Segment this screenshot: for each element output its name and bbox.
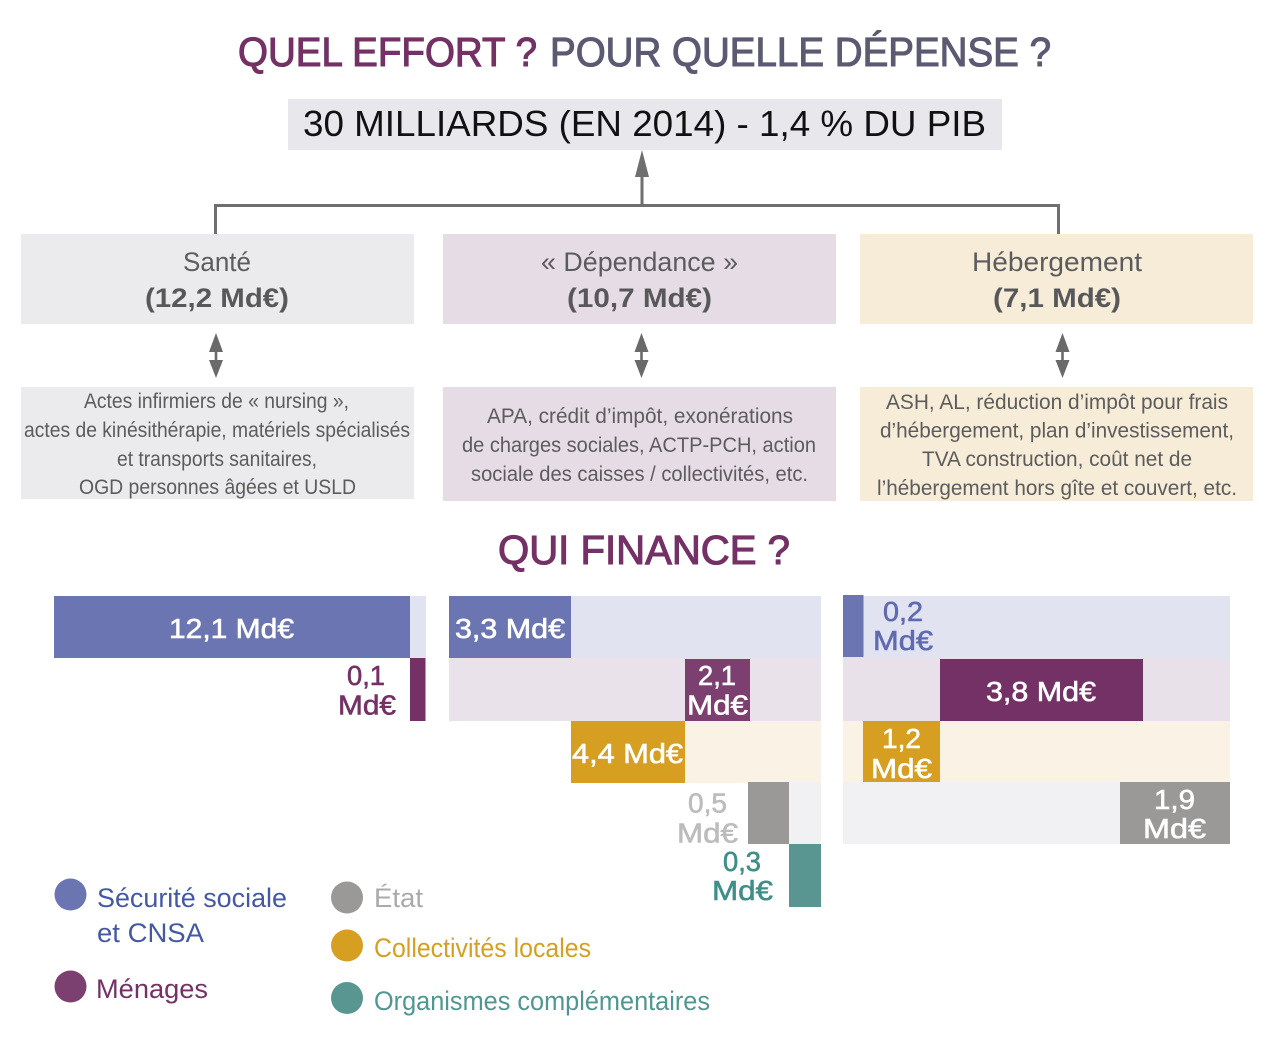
title	[238, 29, 1051, 75]
panel: santé details: OGD personnes âgées et USLD	[79, 476, 356, 499]
chart: hébergement financing: 1,9	[1154, 784, 1195, 815]
panel: hébergement details: l’hébergement hors gîte et couvert, etc.	[877, 477, 1237, 500]
panel: santé heading: (12,2 Md€)	[145, 283, 289, 313]
chart: dépendance financing: Md€	[687, 690, 748, 720]
legend: ménages	[54, 970, 208, 1004]
chart: santé financing: 0,1	[347, 660, 385, 691]
panel: hébergement heading: (7,1 Md€)	[993, 283, 1121, 313]
panel: santé details: et transports sanitaires,	[117, 448, 317, 471]
legend: ménages: Ménages	[96, 974, 208, 1004]
panel: dépendance details	[443, 387, 836, 501]
panel: santé heading: Santé	[183, 247, 251, 277]
legend: état	[331, 882, 424, 914]
chart: santé financing	[54, 596, 426, 721]
panel: dépendance heading: « Dépendance »	[541, 247, 738, 277]
chart: hébergement financing: Md€	[871, 753, 932, 784]
title: QUEL EFFORT ?	[238, 29, 537, 75]
chart: hébergement financing: 0,2	[883, 596, 923, 627]
panel: hébergement details	[860, 387, 1253, 501]
chart: dépendance financing: 0,3	[723, 846, 761, 877]
chart: dépendance financing: Md€	[712, 875, 773, 906]
chart: hébergement financing: 1,2	[882, 723, 921, 754]
legend: sécurité sociale et CNSA: et CNSA	[97, 918, 204, 948]
legend: sécurité sociale et CNSA	[54, 878, 287, 948]
arrow: connector to total	[216, 150, 1058, 234]
total banner: 30 MILLIARDS (EN 2014) - 1,4 % DU PIB	[303, 103, 986, 144]
panel: santé heading	[21, 234, 414, 324]
panel: hébergement heading: Hébergement	[972, 247, 1143, 277]
arrow: dépendance double	[634, 333, 648, 378]
chart: dépendance financing: 3,3 Md€	[455, 613, 565, 644]
title: POUR QUELLE DÉPENSE ?	[550, 29, 1051, 75]
panel: dépendance details: sociale des caisses / collectivités, etc.	[471, 463, 808, 486]
panel: dépendance details: de charges sociales, ACTP-PCH, action	[462, 434, 816, 457]
arrow: santé double	[209, 333, 223, 378]
chart: hébergement financing: Md€	[873, 625, 933, 656]
panel: hébergement details: TVA construction, coût net de	[922, 448, 1192, 471]
chart: hébergement financing: 3,8 Md€	[986, 676, 1096, 707]
heading: qui finance: QUI FINANCE ?	[498, 527, 790, 573]
panel: hébergement details: d’hébergement, plan d’investissement,	[880, 420, 1234, 442]
chart: dépendance financing	[449, 596, 821, 907]
chart: dépendance financing: 4,4 Md€	[572, 738, 683, 769]
chart: hébergement financing: Md€	[1143, 813, 1206, 844]
panel: santé details: Actes infirmiers de « nursing »,	[84, 390, 349, 413]
panel: dépendance heading	[443, 234, 836, 324]
chart: dépendance financing: 2,1	[698, 660, 736, 691]
panel: hébergement details: ASH, AL, réduction d’impôt pour frais	[886, 391, 1228, 414]
chart: santé financing: Md€	[338, 690, 396, 720]
legend: état: État	[374, 883, 424, 913]
arrow: hébergement double	[1056, 333, 1070, 378]
panel: dépendance details: APA, crédit d’impôt, exonérations	[487, 405, 793, 428]
panel: dépendance heading: (10,7 Md€)	[567, 283, 712, 313]
legend: sécurité sociale et CNSA: Sécurité sociale	[97, 883, 287, 913]
legend: organismes complémentaires: Organismes complémentaires	[374, 986, 710, 1016]
legend: collectivités locales: Collectivités locales	[374, 933, 591, 963]
panel: hébergement heading	[860, 234, 1253, 324]
panel: santé details: actes de kinésithérapie, matériels spécialisés	[24, 419, 410, 442]
chart: dépendance financing: Md€	[677, 818, 738, 848]
chart: hébergement financing	[843, 595, 1230, 844]
chart: dépendance financing: 0,5	[688, 788, 727, 818]
panel: santé details	[21, 387, 414, 499]
chart: santé financing: 12,1 Md€	[169, 613, 294, 644]
